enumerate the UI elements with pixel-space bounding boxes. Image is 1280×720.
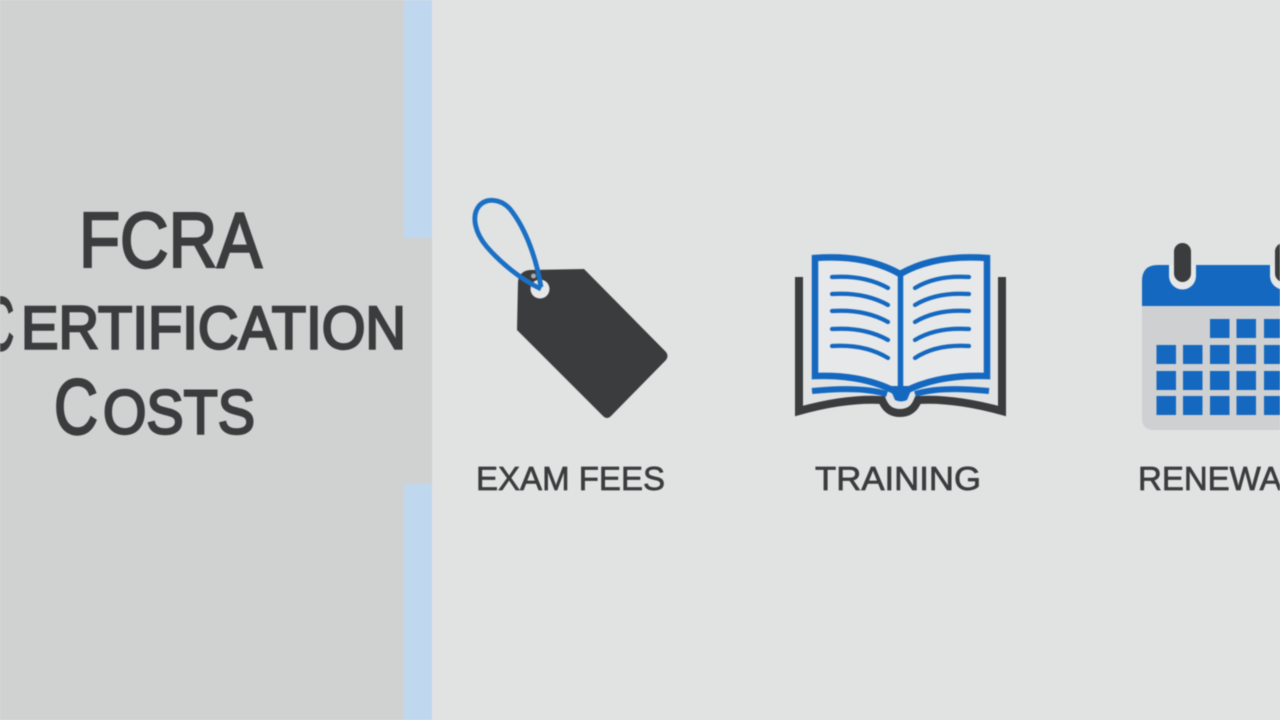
book pages bbox=[815, 257, 987, 394]
left title panel bbox=[0, 0, 432, 720]
label: training: TRAINING bbox=[815, 460, 981, 497]
left page text lines bbox=[832, 277, 888, 358]
label: exam fees: EXAM FEES bbox=[476, 460, 665, 497]
icon: open book bbox=[799, 257, 1002, 413]
calendar body bbox=[1142, 306, 1280, 430]
calendar date grid bbox=[1156, 319, 1280, 415]
book spine bbox=[898, 274, 903, 396]
title line 2: rest: ERTIFICATION bbox=[21, 294, 406, 362]
tag small hole bbox=[531, 274, 536, 278]
right text line set bbox=[915, 277, 969, 358]
tag body bbox=[517, 269, 668, 418]
icon: calendar bbox=[1142, 243, 1280, 430]
tag string loop bbox=[475, 200, 541, 289]
right page text lines bbox=[915, 277, 969, 358]
ring socket bbox=[1169, 265, 1196, 290]
accent strip: lower bbox=[404, 484, 432, 720]
calendar header bbox=[1142, 265, 1280, 306]
tag eyelet bbox=[530, 280, 550, 298]
accent strip: upper bbox=[404, 0, 432, 238]
book lower page edges bbox=[812, 389, 989, 394]
left text line set bbox=[832, 277, 888, 358]
book spine base bbox=[889, 386, 913, 402]
title line 3: initial: C bbox=[54, 362, 98, 450]
icon: price tag bbox=[475, 200, 668, 418]
lower left edge bbox=[812, 389, 887, 394]
calendar right ring bbox=[1270, 243, 1280, 290]
ring bbox=[1174, 243, 1191, 282]
title line 3: rest: OSTS bbox=[103, 378, 255, 448]
calendar left ring bbox=[1169, 243, 1196, 290]
title bbox=[0, 196, 406, 450]
book cover bbox=[799, 277, 1002, 413]
ring socket bbox=[1270, 265, 1280, 290]
title line 1: FCRA bbox=[79, 196, 262, 284]
ring bbox=[1275, 243, 1280, 282]
lower right edge bbox=[915, 389, 989, 394]
